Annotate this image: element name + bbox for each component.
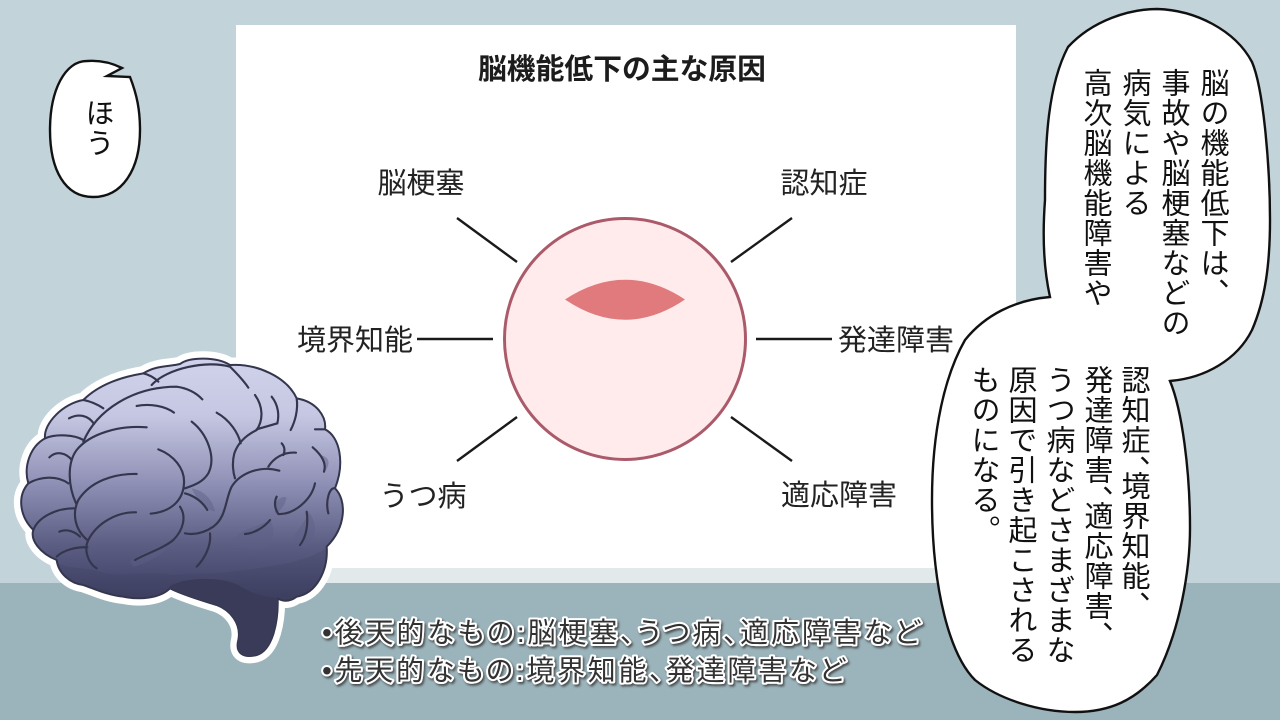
caption text: •先天的なもの:境界知能、発達障害など (322, 655, 847, 686)
label: 脳梗塞: 脳梗塞 (377, 168, 465, 200)
title: 脳機能低下の主な原因 (478, 54, 766, 86)
bubble text: first paragraph: 事故や脳梗塞などの (1157, 68, 1189, 338)
bubble text: first paragraph: 病気による (1118, 68, 1150, 218)
bubble text: second paragraph: 発達障害 、 適応障害、 (1080, 365, 1112, 651)
brain soft shadow patches (130, 455, 329, 567)
background floor (0, 583, 1280, 720)
bubble text: first paragraph: 高次脳機能障害や (1079, 68, 1111, 308)
label: 認知症: 認知症 (780, 168, 868, 200)
label: 適応障害: 適応障害 (781, 480, 897, 512)
bubble text: second paragraph: うつ病などさまざまな (1042, 365, 1074, 665)
bubble text: second paragraph (967, 365, 1150, 665)
bubble text: second paragraph: 認知症 、 境界知能、 (1117, 365, 1149, 621)
bubble text: second paragraph: ものになる。 (967, 365, 999, 545)
brain white outline (21, 359, 343, 656)
bubble text: first paragraph (1079, 68, 1229, 338)
caption text: •後天的なもの:脳梗塞、うつ病、適応障害など (322, 617, 922, 648)
text: ほう: ほう (81, 98, 113, 158)
brain lower shadow (57, 548, 326, 656)
label: 発達障害: 発達障害 (838, 325, 954, 357)
label: 境界知能: 境界知能 (297, 325, 413, 357)
connector lines (417, 218, 832, 461)
panel: whiteboard (236, 25, 1016, 583)
brain folds (28, 364, 335, 568)
lens shape (565, 280, 685, 320)
label: うつ病: うつ病 (379, 481, 467, 513)
bubble text: second paragraph: 原因で引き起こされる (1004, 365, 1036, 665)
brain body (21, 359, 343, 656)
brain stem (170, 579, 278, 656)
bubble text: first paragraph: 脳の機能低下は、 (1196, 68, 1228, 308)
pink circle (504, 218, 746, 460)
